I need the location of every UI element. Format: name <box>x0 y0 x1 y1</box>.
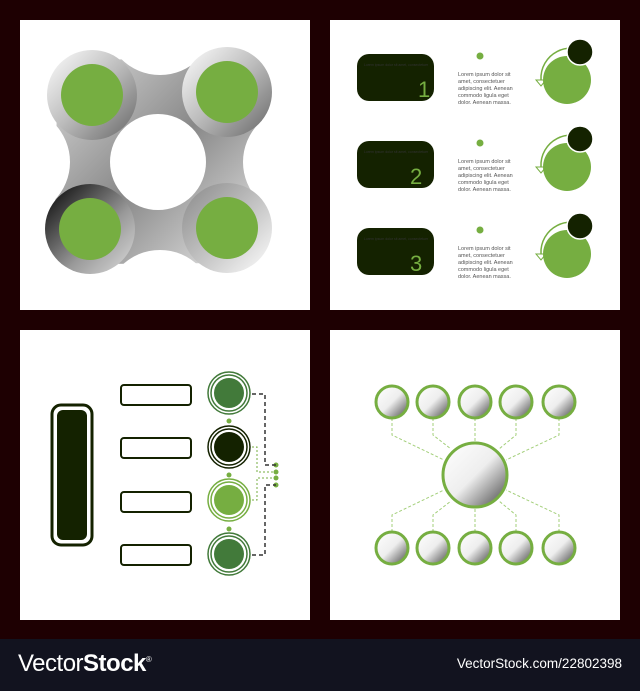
panel: numbered steps: Lorem ipsum dolor sit amet, consectetuer <box>364 63 429 67</box>
panel: numbered steps: Lorem ipsum dolor sit amet, consectetuer <box>364 237 429 241</box>
icon: green dots <box>59 61 258 260</box>
footer: VectorStock.com/22802398 <box>457 656 622 671</box>
panel: numbered steps: commodo ligula eget <box>458 93 509 99</box>
panel: numbered steps: Lorem ipsum dolor sit <box>458 159 511 165</box>
panel: numbered steps: 2 <box>410 164 422 189</box>
panel: numbered steps: amet, consectetuer <box>458 79 505 85</box>
panel: connected circles <box>20 20 310 310</box>
panel: numbered steps <box>330 20 620 310</box>
panel: hub diagram <box>330 330 620 620</box>
panel: numbered steps: amet, consectetuer <box>458 253 505 259</box>
panel: numbered steps: adipiscing elit. Aenean <box>458 260 513 266</box>
panel: numbered steps: adipiscing elit. Aenean <box>458 173 513 179</box>
panel: numbered steps: commodo ligula eget <box>458 267 509 273</box>
panel: numbered steps: adipiscing elit. Aenean <box>458 86 513 92</box>
panel: numbered steps: 1 <box>418 77 430 102</box>
footer: VectorStock® <box>18 650 151 677</box>
panel: numbered steps: dolor. Aenean massa. <box>458 274 511 280</box>
panel: numbered steps: 3 <box>410 251 422 276</box>
panel: numbered steps: commodo ligula eget <box>458 180 509 186</box>
panel: list with circles <box>20 330 310 620</box>
panel: numbered steps: dolor. Aenean massa. <box>458 187 511 193</box>
panel: numbered steps: Lorem ipsum dolor sit <box>458 246 511 252</box>
panel: numbered steps: amet, consectetuer <box>458 166 505 172</box>
panel: numbered steps: dolor. Aenean massa. <box>458 100 511 106</box>
footer <box>0 639 640 691</box>
panel: numbered steps: Lorem ipsum dolor sit <box>458 72 511 78</box>
panel: numbered steps: Lorem ipsum dolor sit amet, consectetuer <box>364 150 429 154</box>
